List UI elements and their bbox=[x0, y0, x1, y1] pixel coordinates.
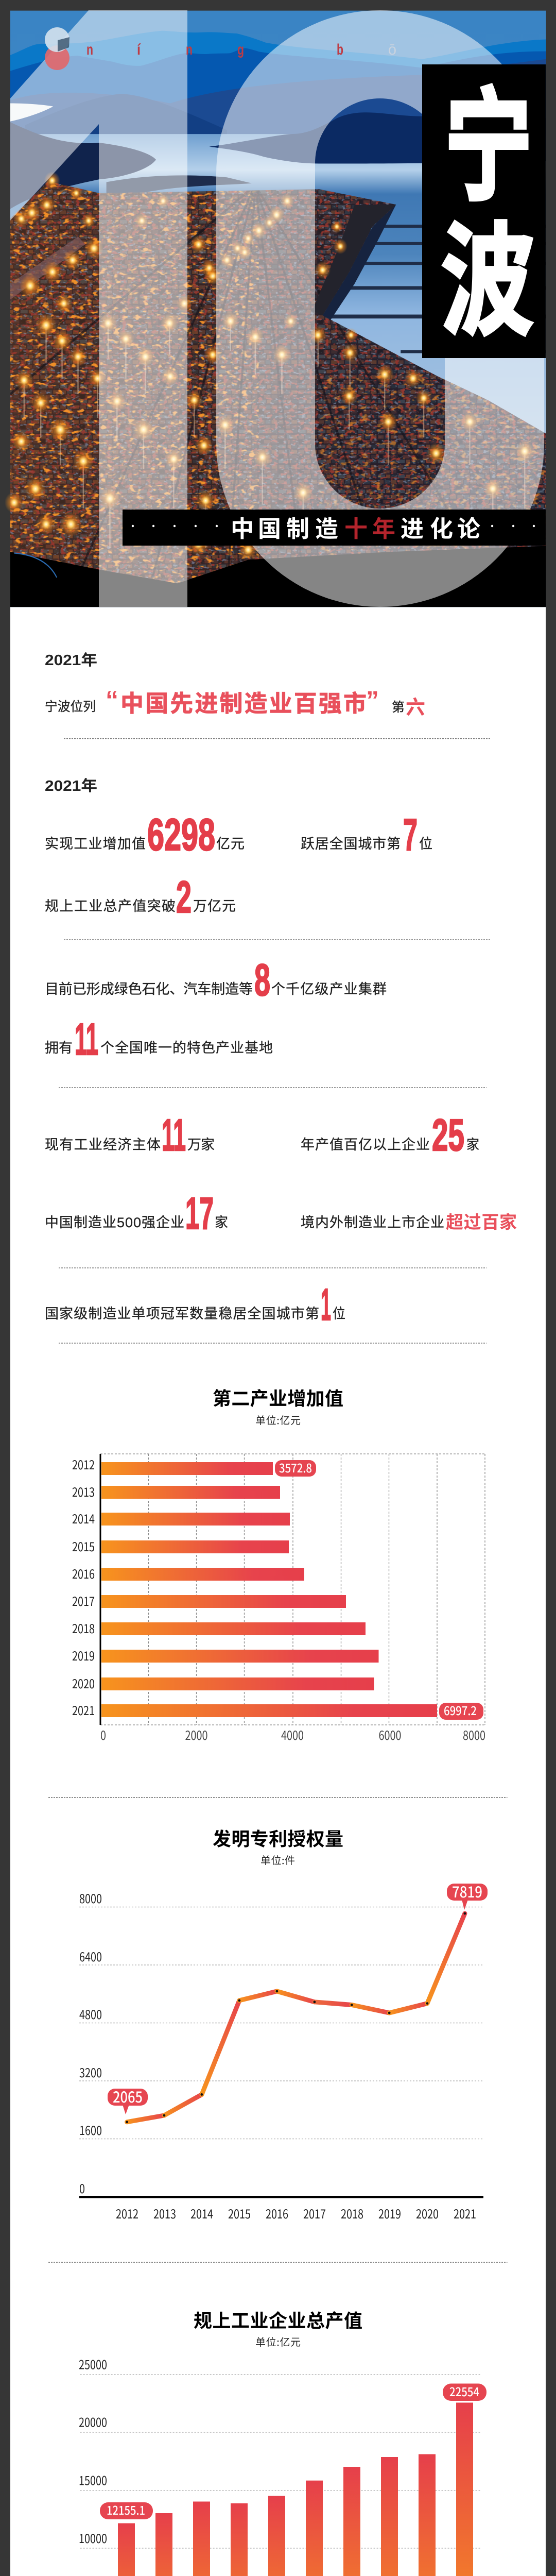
y axis labels bbox=[79, 2354, 107, 2576]
pinyin ningbo: n bbox=[186, 41, 193, 58]
fact: 6298: 6298 bbox=[147, 810, 215, 860]
x axis labels: 8000 bbox=[463, 1725, 485, 1743]
banner text: 十年 bbox=[344, 510, 395, 544]
fact: top 100 rank sixth: 六 bbox=[406, 691, 425, 720]
fact: 11 bases bbox=[45, 1014, 273, 1064]
x axis labels: 2016 bbox=[266, 2204, 288, 2222]
fact: 8 clusters: 目前已形成绿色石化、汽车制造等 bbox=[45, 981, 253, 997]
fact: 110k entities bbox=[45, 1110, 215, 1160]
pinyin ningbo: b bbox=[337, 41, 343, 58]
fact: 110k entities: 现有工业经济主体 bbox=[45, 1137, 161, 1153]
fact: rank 7 bbox=[301, 810, 432, 860]
fact: top 100 rank sixth: 宁波位列 bbox=[45, 700, 96, 714]
chart unit: 单位:亿元 bbox=[255, 1412, 301, 1427]
lamp posts bbox=[24, 321, 525, 548]
x axis labels bbox=[116, 2204, 476, 2222]
y axis labels: 20000 bbox=[79, 2412, 107, 2431]
logo circles bbox=[45, 27, 70, 70]
panel: key facts bbox=[45, 652, 517, 1343]
fact: champion rank 1: 位 bbox=[333, 1306, 345, 1321]
pinyin ningbo: ō bbox=[388, 41, 396, 58]
y axis labels: 0 bbox=[79, 2179, 85, 2197]
fact: 17 firms: 家 bbox=[215, 1215, 228, 1230]
pinyin ningbo: í bbox=[137, 41, 141, 58]
fact: over 100 listed: 境内外制造业上市企业 bbox=[301, 1215, 444, 1230]
panel: line chart, invention patents bbox=[79, 1824, 488, 2222]
x axis labels: 4000 bbox=[281, 1725, 304, 1743]
value pill 12155.1: 12155.1 bbox=[107, 2501, 145, 2518]
fact: top 100 rank sixth bbox=[45, 685, 425, 720]
value pill 22554: 22554 bbox=[449, 2382, 479, 2400]
title: 宁波 bbox=[440, 47, 535, 360]
fact: top 100 rank sixth: 第 bbox=[392, 700, 405, 715]
x axis labels: 2014 bbox=[190, 2204, 213, 2222]
fact: 8 clusters: 个千亿级产业集群 bbox=[271, 981, 387, 997]
heading: 2021 ranking: 2021年 bbox=[45, 652, 97, 669]
x axis labels: 2021 bbox=[454, 2204, 476, 2222]
fact: 17 firms bbox=[45, 1189, 228, 1239]
fact: 2 trillion bbox=[45, 872, 236, 922]
black title box bbox=[422, 64, 546, 358]
fact: 110k entities: 万家 bbox=[187, 1137, 215, 1153]
year labels: 2013 bbox=[72, 1482, 95, 1500]
data points bbox=[126, 1912, 466, 2123]
fact: 25 firms: 家 bbox=[466, 1137, 479, 1153]
banner dots bbox=[132, 525, 535, 527]
y axis labels: 3200 bbox=[79, 2063, 102, 2081]
banner text bbox=[231, 510, 480, 544]
fact: 2 trillion: 规上工业总产值突破 bbox=[45, 899, 176, 914]
x axis labels: 2000 bbox=[185, 1725, 208, 1743]
big translucent numeral 10 bbox=[10, 10, 544, 607]
y axis labels: 4800 bbox=[79, 2005, 102, 2023]
fact: top 100 rank sixth: 中国先进制造业百强市 bbox=[120, 685, 367, 718]
value pill 3572.8: 3572.8 bbox=[279, 1459, 312, 1476]
y axis labels: 25000 bbox=[79, 2354, 107, 2373]
chart unit: 单位:件 bbox=[260, 1852, 295, 1867]
fact: 2 trillion: 万亿元 bbox=[193, 899, 236, 914]
bars bbox=[101, 1462, 437, 1717]
y axis labels: 10000 bbox=[79, 2529, 107, 2547]
fact: rank 7: 位 bbox=[419, 836, 432, 852]
white content panel bbox=[10, 607, 546, 2576]
fact: 25 firms: 25 bbox=[432, 1110, 464, 1160]
fact: 17 firms: 17 bbox=[185, 1189, 214, 1239]
line series bbox=[127, 1913, 465, 2122]
pinyin ningbo: n bbox=[86, 41, 93, 58]
fact: 11 bases: 11 bbox=[75, 1014, 98, 1064]
fact: rank 7: 7 bbox=[403, 810, 418, 860]
y axis labels: 8000 bbox=[79, 1889, 102, 1907]
fact: 6298: 实现工业增加值 bbox=[45, 836, 146, 852]
fact: 25 firms: 年产值百亿以上企业 bbox=[301, 1137, 430, 1153]
fact: champion rank 1 bbox=[45, 1280, 345, 1330]
chart title: 规上工业企业总产值 bbox=[194, 2306, 362, 2333]
callout 2065: 2065 bbox=[113, 2086, 143, 2107]
columns bbox=[118, 2403, 473, 2576]
year labels: 2019 bbox=[72, 1646, 95, 1664]
fact: champion rank 1: 1 bbox=[321, 1280, 331, 1330]
fact: 8 clusters: 8 bbox=[254, 955, 270, 1005]
y axis labels: 15000 bbox=[79, 2471, 107, 2488]
x axis labels: 0 bbox=[100, 1725, 106, 1743]
fact: champion rank 1: 国家级制造业单项冠军数量稳居全国城市第 bbox=[45, 1306, 319, 1321]
chart unit: 单位:亿元 bbox=[255, 2334, 301, 2349]
panel: column chart, industrial output bbox=[79, 2306, 486, 2576]
fact: over 100 listed: 超过百家 bbox=[446, 1208, 517, 1233]
year labels: 2018 bbox=[72, 1619, 95, 1637]
pinyin ningbo: g bbox=[237, 41, 244, 58]
year labels: 2021 bbox=[72, 1701, 95, 1719]
port yard bbox=[10, 177, 546, 595]
banner text: 中国制造 bbox=[231, 510, 338, 544]
year labels: 2017 bbox=[72, 1591, 95, 1609]
year labels: 2014 bbox=[72, 1509, 95, 1527]
fact: 2 trillion: 2 bbox=[176, 872, 192, 922]
y axis labels: 1600 bbox=[79, 2121, 102, 2139]
callout 7819: 7819 bbox=[452, 1880, 482, 1902]
x axis labels: 2019 bbox=[378, 2204, 401, 2222]
fact: 11 bases: 拥有 bbox=[45, 1040, 73, 1056]
year labels: 2020 bbox=[72, 1674, 95, 1692]
panel: hero cover bbox=[2, 10, 546, 607]
year labels: 2012 bbox=[72, 1455, 95, 1473]
year labels bbox=[72, 1455, 95, 1719]
x axis labels: 6000 bbox=[379, 1725, 402, 1743]
year labels: 2016 bbox=[72, 1564, 95, 1582]
x axis labels: 2013 bbox=[153, 2204, 176, 2222]
port lights bbox=[2, 168, 537, 563]
x axis labels: 2020 bbox=[416, 2204, 439, 2222]
fact: top 100 rank sixth: ” bbox=[366, 686, 379, 715]
fact: over 100 listed bbox=[301, 1208, 517, 1233]
fact: 25 firms bbox=[301, 1110, 479, 1160]
x axis labels: 2018 bbox=[341, 2204, 363, 2222]
fact: 110k entities: 11 bbox=[162, 1110, 186, 1160]
x axis labels: 2017 bbox=[303, 2204, 326, 2222]
x axis labels: 2015 bbox=[228, 2204, 251, 2222]
y axis labels: 6400 bbox=[79, 1947, 102, 1965]
chart title: 第二产业增加值 bbox=[213, 1384, 343, 1411]
hero photo: port at dusk bbox=[2, 11, 546, 607]
x axis labels bbox=[100, 1725, 485, 1743]
fact: 6298 bbox=[45, 810, 245, 860]
value pill 6997.2: 6997.2 bbox=[444, 1701, 477, 1719]
fact: 17 firms: 中国制造业500强企业 bbox=[45, 1215, 184, 1230]
fact: 8 clusters bbox=[45, 955, 387, 1005]
year labels: 2015 bbox=[72, 1537, 95, 1555]
x axis labels: 2012 bbox=[116, 2204, 138, 2222]
fact: rank 7: 跃居全国城市第 bbox=[301, 836, 401, 852]
panel: horizontal bar chart, secondary industry bbox=[72, 1384, 485, 1743]
banner text: 进化论 bbox=[401, 510, 480, 544]
fact: top 100 rank sixth: “ bbox=[106, 686, 118, 715]
y axis labels bbox=[79, 1889, 102, 2197]
pinyin ningbo bbox=[86, 41, 396, 58]
fact: 11 bases: 个全国唯一的特色产业基地 bbox=[100, 1040, 273, 1056]
fact: 6298: 亿元 bbox=[216, 836, 245, 852]
heading: 2021 industry: 2021年 bbox=[45, 777, 97, 794]
callout 7819 bbox=[447, 1880, 488, 1910]
callout 2065 bbox=[108, 2086, 148, 2114]
subtitle banner bbox=[123, 510, 546, 546]
chart title: 发明专利授权量 bbox=[213, 1824, 343, 1851]
